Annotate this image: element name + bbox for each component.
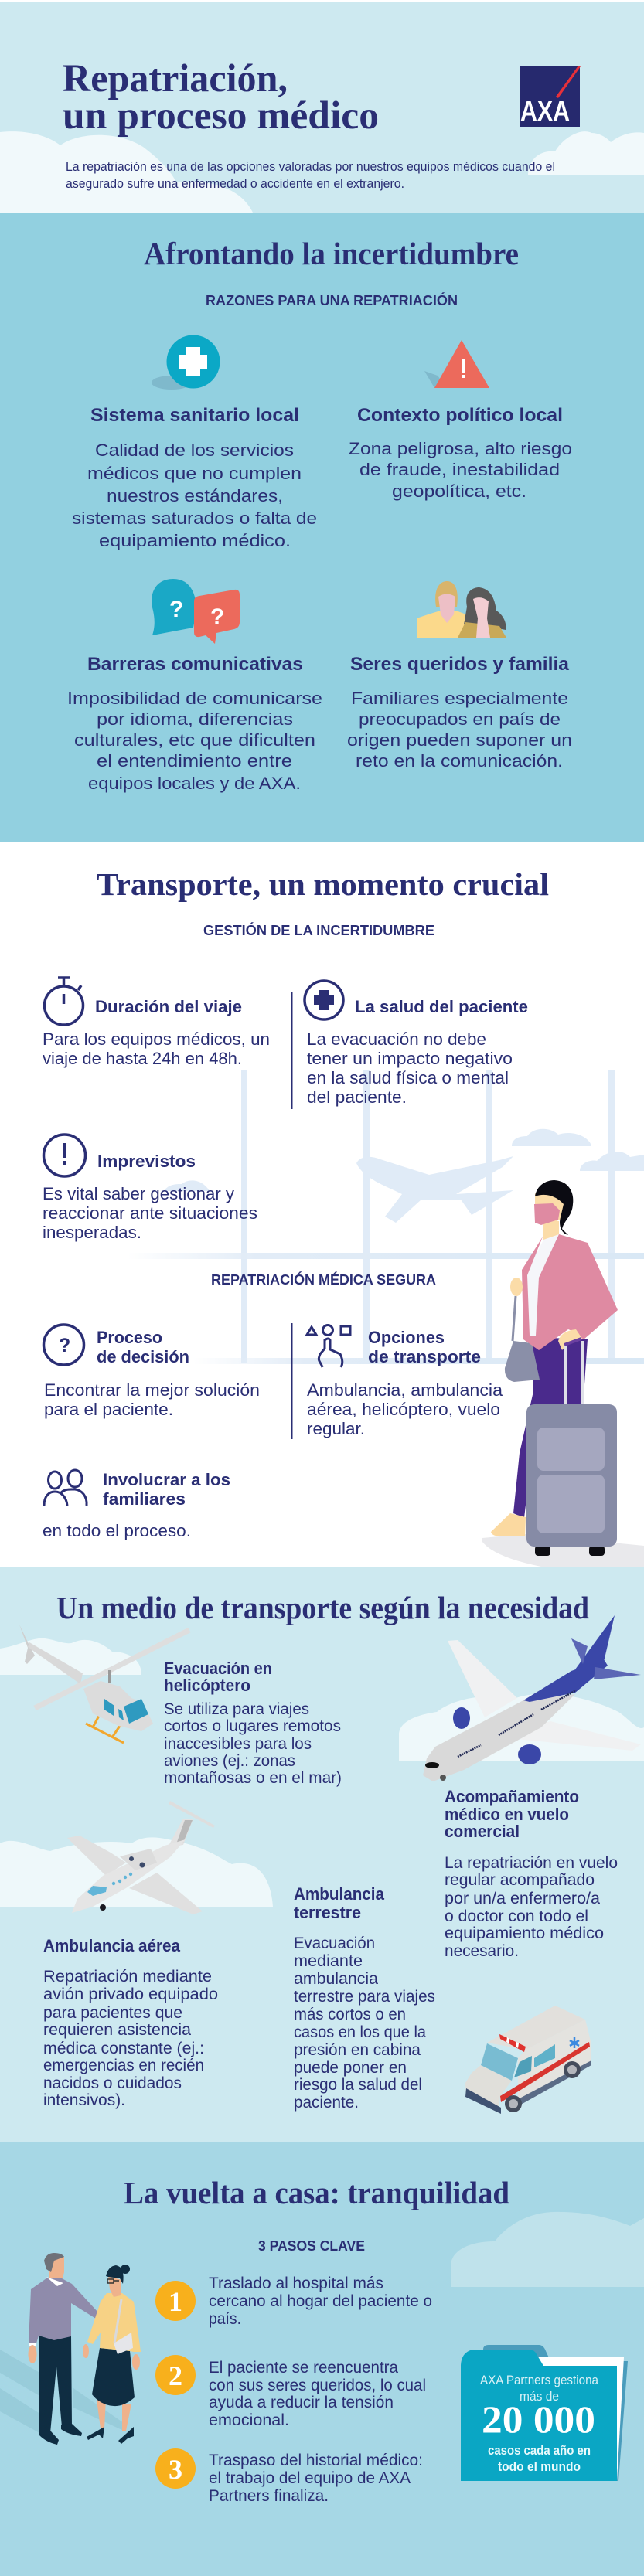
- icon: family outline: [44, 1470, 87, 1506]
- icon: question: ?: [59, 1335, 70, 1356]
- reason: contexto politico: [349, 405, 572, 501]
- illustration: private jet: [67, 1801, 215, 1914]
- man: [49, 2257, 64, 2286]
- item: opciones de transporte: aérea, helicóptero, vuelo: [307, 1400, 500, 1419]
- panel: medios de transporte: [0, 1567, 644, 2142]
- item: ambulancia aerea: médica constante (ej.:: [43, 2040, 204, 2057]
- item: involucrar a los familiares: familiares: [103, 1489, 186, 1509]
- step 2: emocional.: [209, 2411, 289, 2429]
- item: ambulancia terrestre: mediante: [294, 1952, 363, 1970]
- reason: sistema sanitario: médicos que no cumplen: [87, 464, 302, 483]
- cloud: [451, 2212, 644, 2287]
- item: imprevistos: reaccionar ante situaciones: [43, 1203, 257, 1223]
- item: helicoptero: Evacuación en: [164, 1659, 272, 1678]
- woman: [97, 2400, 131, 2431]
- item: duracion del viaje: viaje de hasta 24h en 48h.: [43, 1049, 242, 1068]
- reason: barreras comunicativas: culturales, etc que dificulten: [74, 730, 315, 750]
- icon: health cross: [305, 981, 343, 1019]
- panel: afrontando la incertidumbre: [0, 213, 644, 842]
- item: opciones de transporte: de transporte: [368, 1347, 481, 1366]
- subheading: REPATRIACIÓN MÉDICA SEGURA: [211, 1271, 436, 1288]
- illustration: helicopter: [19, 1625, 189, 1743]
- logo: AXA: [520, 66, 581, 127]
- icon: exclamation: [43, 1135, 85, 1176]
- item: ambulancia terrestre: Ambulancia: [294, 1884, 384, 1904]
- icon: family: [417, 581, 506, 638]
- item: helicoptero: helicóptero: [164, 1676, 250, 1695]
- item: vuelo comercial: equipamiento médico: [445, 1924, 604, 1942]
- step 2: [155, 2355, 426, 2429]
- item: helicoptero: montañosas o en el mar): [164, 1769, 342, 1787]
- illustration: woman with suitcase: [482, 1180, 644, 1567]
- callout: folder statistic: casos cada año en: [488, 2444, 591, 2458]
- item: duracion del viaje: Duración del viaje: [95, 997, 242, 1016]
- reason: contexto politico: geopolítica, etc.: [392, 482, 526, 501]
- item: imprevistos: Imprevistos: [97, 1152, 196, 1171]
- reason: seres queridos: origen pueden suponer un: [347, 730, 572, 750]
- subheading: GESTIÓN DE LA INCERTIDUMBRE: [203, 922, 434, 938]
- item: ambulancia aerea: [43, 1936, 218, 2109]
- illustration: couple: [0, 2253, 141, 2445]
- step 3: [155, 2448, 423, 2505]
- heading: Transporte, un momento crucial: [97, 866, 549, 902]
- neck: [543, 1221, 559, 1246]
- item: proceso de decision: Proceso: [97, 1328, 162, 1347]
- callout: folder statistic: AXA Partners gestiona: [480, 2374, 599, 2387]
- item: vuelo comercial: comercial: [445, 1822, 520, 1841]
- title: Repatriación,: [63, 57, 288, 100]
- callout: folder statistic: más de: [520, 2390, 559, 2404]
- item: proceso de decision: [44, 1328, 260, 1419]
- step 3: el trabajo del equipo de AXA: [209, 2469, 411, 2487]
- item: involucrar a los familiares: Involucrar a los: [103, 1470, 230, 1489]
- logo: AXA: AXA: [520, 95, 570, 127]
- step 2: 2: [169, 2360, 182, 2391]
- suitcase: [535, 1546, 550, 1556]
- item: imprevistos: inesperadas.: [43, 1223, 141, 1242]
- item: ambulancia aerea: avión privado equipado: [43, 1986, 218, 2003]
- reason: contexto politico: Zona peligrosa, alto riesgo: [349, 439, 572, 458]
- reason: barreras comunicativas: Imposibilidad de comunicarse: [67, 689, 322, 708]
- item: ambulancia aerea: requieren asistencia: [43, 2021, 191, 2039]
- item: helicoptero: cortos o lugares remotos: [164, 1717, 341, 1735]
- reason: seres queridos: reto en la comunicación.: [356, 751, 563, 771]
- shirt: [526, 1234, 559, 1337]
- reason: seres queridos: Familiares especialmente: [351, 689, 568, 708]
- item: vuelo comercial: regular acompañado: [445, 1871, 595, 1889]
- item: vuelo comercial: o doctor con todo el: [445, 1907, 588, 1925]
- item: salud del paciente: La evacuación no debe: [307, 1029, 486, 1049]
- item: opciones de transporte: regular.: [307, 1419, 365, 1438]
- title: [63, 57, 379, 138]
- icon: question: [43, 1325, 83, 1365]
- item: ambulancia aerea: emergencias en recién: [43, 2057, 204, 2074]
- item: ambulancia terrestre: más cortos o en: [294, 2006, 406, 2023]
- panel: header: [0, 2, 644, 213]
- item: salud del paciente: tener un impacto negativo: [307, 1049, 513, 1068]
- heading: Afrontando la incertidumbre: [144, 236, 519, 271]
- item: ambulancia terrestre: ambulancia: [294, 1970, 378, 1988]
- item: ambulancia terrestre: [294, 1884, 435, 2112]
- reason: sistema sanitario: equipamiento médico.: [99, 531, 291, 550]
- background: airport window and plane: [128, 1070, 644, 1364]
- item: opciones de transporte: Ambulancia, ambulancia: [307, 1380, 503, 1400]
- intro text: La repatriación es una de las opciones valoradas por nuestros equipos médicos cuando el: [66, 160, 555, 174]
- intro text: asegurado sufre una enfermedad o accidente en el extranjero.: [66, 177, 404, 191]
- item: ambulancia terrestre: terrestre: [294, 1903, 361, 1922]
- item: salud del paciente: del paciente.: [307, 1087, 407, 1107]
- reason: contexto politico: de fraude, inestabilidad: [359, 460, 560, 479]
- item: ambulancia terrestre: presión en cabina: [294, 2041, 421, 2059]
- item: opciones de transporte: Opciones: [368, 1328, 445, 1347]
- suitcase handle: [566, 1341, 583, 1404]
- item: ambulancia aerea: nacidos o cuidados: [43, 2074, 182, 2092]
- item: vuelo comercial: La repatriación en vuelo: [445, 1854, 618, 1872]
- item: ambulancia terrestre: paciente.: [294, 2094, 359, 2112]
- item: vuelo comercial: por un/a enfermero/a: [445, 1890, 600, 1907]
- icon: options with hand: [307, 1325, 350, 1367]
- icon: stopwatch: [45, 978, 83, 1025]
- header clouds: [0, 131, 644, 213]
- icon: medical cross: [152, 335, 220, 390]
- subheading: RAZONES PARA UNA REPATRIACIÓN: [206, 292, 458, 308]
- item: ambulancia aerea: Repatriación mediante: [43, 1968, 212, 1986]
- item: ambulancia terrestre: casos en los que la: [294, 2023, 426, 2041]
- step 1: [155, 2275, 432, 2328]
- item: ambulancia terrestre: Evacuación: [294, 1935, 375, 1952]
- icon: warning triangle: [424, 340, 489, 388]
- item: proceso de decision: para el paciente.: [44, 1400, 173, 1419]
- step 3: 3: [169, 2454, 182, 2485]
- jacket: [522, 1234, 618, 1350]
- heading: Un medio de transporte según la necesidad: [56, 1590, 589, 1625]
- reason: seres queridos: Seres queridos y familia: [350, 654, 570, 675]
- reason: barreras comunicativas: [67, 654, 322, 793]
- item: ambulancia terrestre: puede poner en: [294, 2059, 407, 2077]
- item: vuelo comercial: necesario.: [445, 1942, 519, 1960]
- item: duracion del viaje: Para los equipos médicos, un: [43, 1029, 270, 1049]
- reason: barreras comunicativas: por idioma, diferencias: [97, 710, 293, 729]
- item: ambulancia aerea: Ambulancia aérea: [43, 1936, 180, 1955]
- icon: speech bubbles: [152, 579, 240, 644]
- hands: [510, 1278, 523, 1296]
- item: vuelo comercial: Acompañamiento: [445, 1787, 579, 1806]
- subheading: 3 PASOS CLAVE: [258, 2238, 365, 2254]
- item: salud del paciente: [307, 997, 528, 1107]
- pants and foot: [513, 1337, 588, 1518]
- item: duracion del viaje: [43, 997, 270, 1068]
- item: ambulancia aerea: intensivos).: [43, 2091, 125, 2109]
- bag: [513, 1296, 516, 1341]
- reason: sistema sanitario: [72, 405, 317, 550]
- item: ambulancia aerea: para pacientes que: [43, 2004, 182, 2022]
- panel: transporte: [0, 842, 644, 1567]
- reason: sistema sanitario: nuestros estándares,: [107, 486, 283, 505]
- item: involucrar a los familiares: [43, 1470, 230, 1540]
- reason: barreras comunicativas: el entendimiento entre: [97, 751, 292, 771]
- item: salud del paciente: La salud del paciente: [355, 997, 528, 1016]
- panel: la vuelta a casa: [0, 2142, 644, 2576]
- reason: barreras comunicativas: equipos locales y de AXA.: [88, 774, 301, 793]
- icon: speech bubbles: ?: [169, 597, 183, 622]
- item: ambulancia terrestre: terrestre para viajes: [294, 1988, 435, 2006]
- step 2: El paciente se reencuentra: [209, 2359, 398, 2377]
- step 1: Traslado al hospital más: [209, 2275, 383, 2292]
- reason: sistema sanitario: Calidad de los servicios: [95, 441, 294, 460]
- item: proceso de decision: de decisión: [97, 1347, 189, 1366]
- item: ambulancia terrestre: riesgo la salud del: [294, 2076, 422, 2094]
- step 1: país.: [209, 2310, 241, 2328]
- reason: seres queridos: [347, 654, 572, 771]
- item: opciones de transporte: [307, 1328, 503, 1438]
- heading: La vuelta a casa: tranquilidad: [124, 2175, 509, 2210]
- reason: sistema sanitario: Sistema sanitario local: [90, 405, 299, 426]
- callout: folder statistic: [461, 2345, 628, 2481]
- item: vuelo comercial: médico en vuelo: [445, 1805, 569, 1824]
- icon: speech bubbles: ?: [210, 604, 224, 630]
- reason: contexto politico: Contexto político local: [357, 405, 563, 426]
- step 2: con sus seres queridos, lo cual: [209, 2377, 426, 2394]
- illustration: ambulance: [465, 2006, 591, 2114]
- intro text: [66, 160, 555, 191]
- callout: folder statistic: 20 000: [482, 2397, 595, 2441]
- item: imprevistos: [43, 1152, 257, 1242]
- step 3: Partners finaliza.: [209, 2487, 329, 2505]
- item: imprevistos: Es vital saber gestionar y: [43, 1184, 235, 1203]
- item: helicoptero: [164, 1659, 342, 1787]
- callout: folder statistic: todo el mundo: [498, 2460, 581, 2474]
- item: helicoptero: Se utiliza para viajes: [164, 1700, 309, 1718]
- reason: seres queridos: preocupados en país de: [359, 710, 561, 729]
- item: salud del paciente: en la salud física o mental: [307, 1068, 509, 1087]
- item: vuelo comercial: [445, 1787, 618, 1960]
- illustration: commercial plane: [423, 1615, 641, 1781]
- reason: barreras comunicativas: Barreras comunicativas: [87, 654, 303, 675]
- clouds: [0, 1638, 644, 1907]
- reason: sistema sanitario: sistemas saturados o falta de: [72, 509, 317, 528]
- title: un proceso médico: [63, 94, 379, 138]
- step 3: Traspaso del historial médico:: [209, 2452, 423, 2469]
- step 2: ayuda a reducir la tensión: [209, 2394, 394, 2411]
- step 1: 1: [169, 2286, 182, 2317]
- head: [535, 1183, 564, 1225]
- item: helicoptero: inaccesibles para los: [164, 1735, 312, 1753]
- item: proceso de decision: Encontrar la mejor solución: [44, 1380, 260, 1400]
- step 1: cercano al hogar del paciente o: [209, 2292, 432, 2310]
- item: involucrar a los familiares: en todo el proceso.: [43, 1521, 191, 1540]
- item: helicoptero: aviones (ej.: zonas: [164, 1752, 295, 1770]
